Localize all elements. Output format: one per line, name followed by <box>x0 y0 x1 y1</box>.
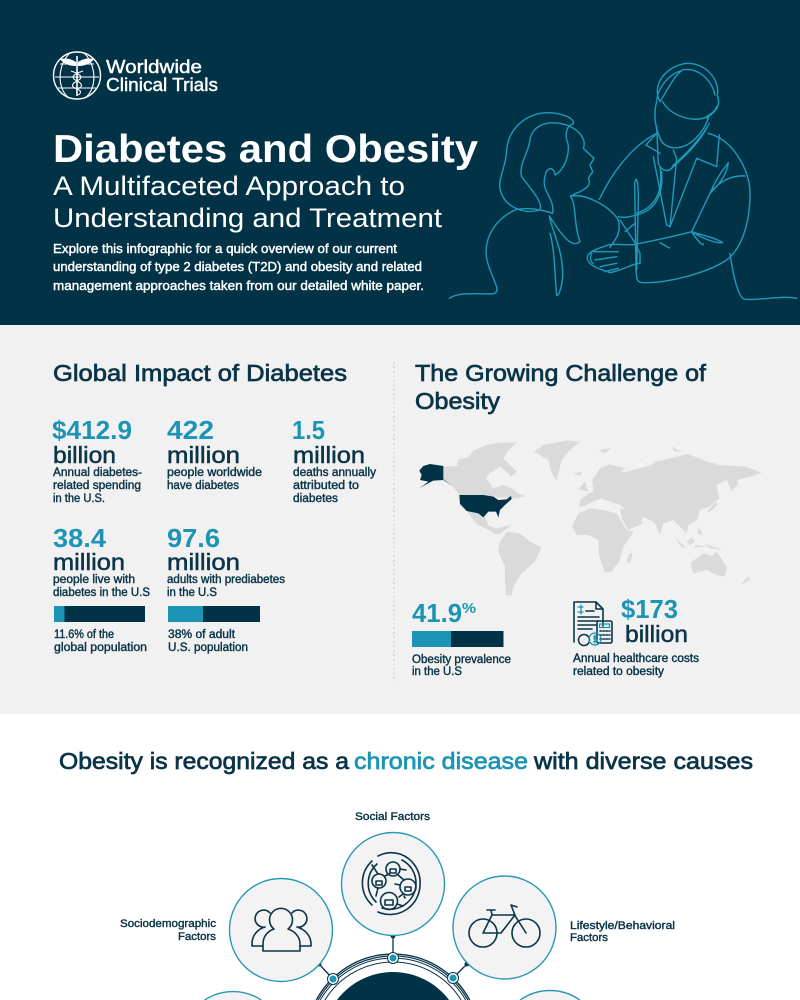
stat: 97.6 million: million <box>167 549 240 575</box>
stat: 1.5 million: diabetes <box>293 493 338 505</box>
stat: 97.6 million: in the U.S <box>167 587 217 599</box>
circle: Social Factors <box>342 832 444 936</box>
stat: 1.5 million: 1.5 <box>292 415 325 445</box>
circle: lower right factor <box>520 991 580 1000</box>
subtitle: Understanding and Treatment <box>53 203 443 233</box>
circle: Lifestyle/Behavioral Factors <box>453 876 556 979</box>
stat: $173 billion: Annual healthcare costs <box>573 653 699 665</box>
illustration: doctor and patient line art <box>449 63 797 300</box>
stat: $412.9 billion: billion <box>53 442 116 468</box>
stat: 1.5 million: million <box>293 442 365 468</box>
logo: Worldwide Clinical Trials <box>54 52 218 99</box>
logo: Worldwide Clinical Trials: Worldwide <box>106 57 202 77</box>
stat: 422 million: 422 <box>167 415 214 445</box>
circle: lower left factor <box>205 992 261 1000</box>
subtitle <box>53 171 443 233</box>
text: Sociodemographic Factors: Sociodemographic <box>120 918 217 930</box>
stat: $412.9 billion: Annual diabetes- <box>53 467 142 479</box>
subtitle: A Multifaceted Approach to <box>53 171 405 201</box>
heading: Global Impact of Diabetes: Global Impact of Diabetes <box>53 360 347 386</box>
world map <box>419 441 762 596</box>
stat: 422 million: people worldwide <box>167 467 262 479</box>
connectors and rings <box>316 934 470 1000</box>
stat: $173 billion: $173 <box>621 594 678 624</box>
stat: 41.9% obesity prevalence: Obesity prevalence <box>412 654 511 666</box>
heading: Obesity is recognized as a chronic disease: chronic disease <box>354 748 528 774</box>
stat: 38.4 million: 11.6% of the <box>54 629 114 641</box>
stat: 41.9% obesity prevalence: % <box>462 600 476 617</box>
stat: 38.4 million: diabetes in the U.S <box>53 587 150 599</box>
stat: 422 million: have diabetes <box>167 480 239 492</box>
icon: document, calculator and coins <box>574 602 612 646</box>
stat: 41.9% obesity prevalence <box>412 598 511 678</box>
stat: $173 billion <box>573 594 699 678</box>
stat: 1.5 million: deaths annually <box>293 467 376 479</box>
stat: 97.6 million: 38% of adult <box>168 629 236 641</box>
intro text: Explore this infographic for a quick overview of our current <box>53 242 398 256</box>
stat: $173 billion: related to obesity <box>573 666 664 678</box>
text: Social Factors: Social Factors <box>355 811 431 823</box>
node markers <box>328 952 458 984</box>
heading: Obesity is recognized as a chronic disease: Obesity is recognized as a <box>59 748 349 774</box>
heading: The Growing Challenge of Obesity: The Growing Challenge of <box>415 360 707 386</box>
text: Sociodemographic Factors <box>120 918 217 943</box>
intro text: management approaches taken from our detailed white paper. <box>53 279 424 293</box>
stat: 38.4 million: global population <box>54 642 147 654</box>
bar: 11.6% <box>54 606 145 622</box>
stat: $412.9 billion: related spending <box>53 480 141 492</box>
stat: 97.6 million: U.S. population <box>168 642 248 654</box>
stat: 38.4 million <box>53 523 150 654</box>
title: Diabetes and Obesity <box>53 128 478 171</box>
divider <box>393 362 395 682</box>
heading: Obesity is recognized as a chronic disease <box>59 748 753 774</box>
intro text: understanding of type 2 diabetes (T2D) and obesity and related <box>53 260 422 274</box>
stat: $173 billion: billion <box>625 621 688 647</box>
heading: The Growing Challenge of Obesity <box>415 360 707 414</box>
text: Lifestyle/Behavioral Factors: Lifestyle/Behavioral <box>570 920 675 932</box>
text: Lifestyle/Behavioral Factors <box>570 920 675 944</box>
panel: statistics background <box>0 325 800 714</box>
logo: Worldwide Clinical Trials: Clinical Trials <box>106 75 218 95</box>
heading: The Growing Challenge of Obesity: Obesity <box>415 388 501 414</box>
panel: Global Impact of Diabetes <box>52 360 376 654</box>
stat: 38.4 million: 38.4 <box>53 523 107 553</box>
stat: $412.9 billion <box>52 415 142 505</box>
stat: 1.5 million: attributed to <box>293 480 359 492</box>
stat: 1.5 million <box>292 415 376 505</box>
panel: header <box>0 0 800 325</box>
stat: 97.6 million: adults with prediabetes <box>167 574 285 586</box>
panel: The Growing Challenge of Obesity <box>412 360 762 678</box>
circle: Sociodemographic Factors <box>230 878 332 982</box>
panel: causes diagram <box>120 811 675 1000</box>
text: Sociodemographic Factors: Factors <box>178 931 217 943</box>
stat: 97.6 million: 97.6 <box>167 523 220 553</box>
stat: 41.9% obesity prevalence: 41.9 <box>412 598 462 628</box>
stat: $412.9 billion: $412.9 <box>52 415 132 445</box>
stat: $412.9 billion: in the U.S. <box>53 493 105 505</box>
stat: 38.4 million: people live with <box>53 574 135 586</box>
stat: 422 million: million <box>167 442 240 468</box>
bar: 41.9% <box>412 631 504 647</box>
bar: 38% <box>168 606 260 622</box>
intro text <box>53 242 424 293</box>
heading: Obesity is recognized as a chronic disease: with diverse causes <box>533 748 753 774</box>
stat: 422 million <box>167 415 262 492</box>
stat: 97.6 million <box>167 523 285 654</box>
stat: 41.9% obesity prevalence: in the U.S <box>412 666 462 678</box>
stat: 38.4 million: million <box>53 549 125 575</box>
text: Lifestyle/Behavioral Factors: Factors <box>570 932 609 944</box>
